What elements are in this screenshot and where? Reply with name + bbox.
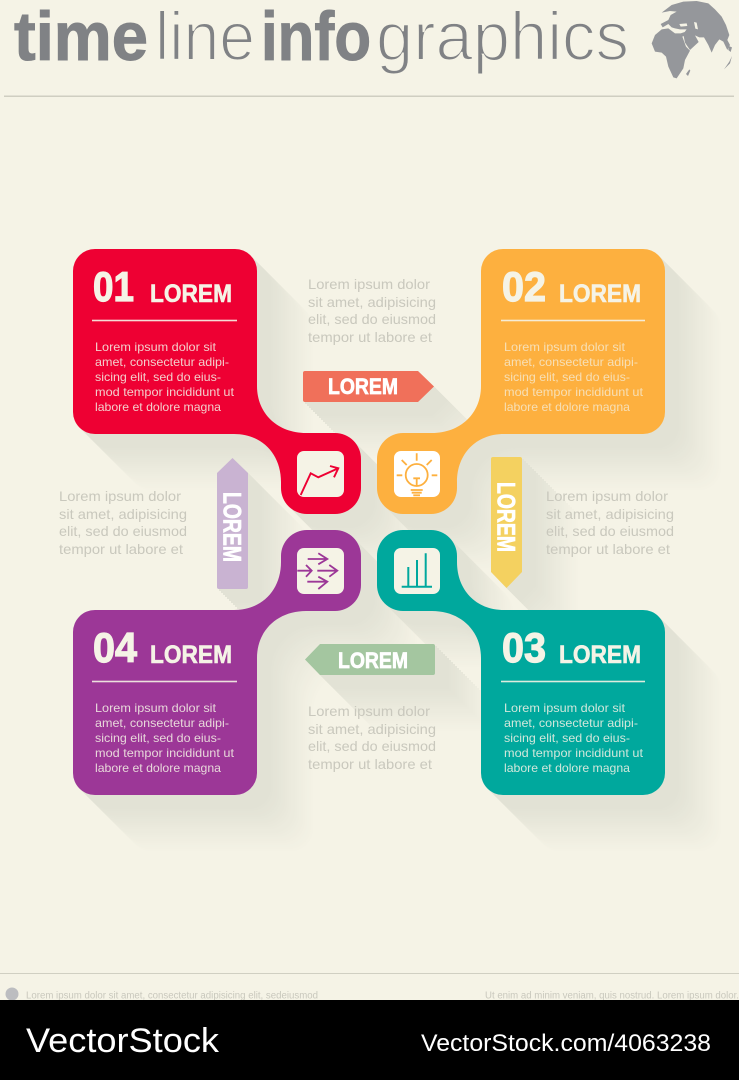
number 01: 01 xyxy=(93,263,134,310)
text block: bottom: Lorem ipsum dolor xyxy=(308,703,430,719)
text block: bottom: tempor ut labore et xyxy=(308,756,432,772)
body text 04: sicing elit, sed do eius- xyxy=(95,731,221,745)
icon: rising line chart xyxy=(297,451,344,497)
body text 04: mod tempor incididunt ut xyxy=(95,746,235,760)
title: graphics xyxy=(376,0,629,75)
body text 04: Lorem ipsum dolor sit xyxy=(95,701,217,715)
body text 03: amet, consectetur adipi- xyxy=(504,716,638,730)
arrow: bottom green: LOREM xyxy=(338,648,408,673)
panel 01: red xyxy=(73,249,361,514)
body text 01: mod tempor incididunt ut xyxy=(95,385,235,399)
body text 02 xyxy=(504,340,644,414)
panel 02: orange xyxy=(377,249,665,514)
body text 02: Lorem ipsum dolor sit xyxy=(504,340,626,354)
arrow: top coral xyxy=(303,371,434,402)
heading 02: LOREM xyxy=(559,280,641,308)
watermark bar: VectorStock xyxy=(26,1022,220,1060)
panel 04: purple xyxy=(73,530,361,795)
text block: right: elit, sed do eiusmod xyxy=(546,523,674,539)
text block: bottom: elit, sed do eiusmod xyxy=(308,738,436,754)
icon: light bulb xyxy=(394,451,440,497)
body text 03 xyxy=(504,701,644,775)
text block: left: sit amet, adipisicing xyxy=(59,506,187,522)
footer xyxy=(0,973,739,1002)
body text 01: amet, consectetur adipi- xyxy=(95,355,229,369)
title: info xyxy=(261,0,371,75)
title xyxy=(14,0,629,75)
text block: right: Lorem ipsum dolor xyxy=(546,488,668,504)
text block: left: elit, sed do eiusmod xyxy=(59,523,187,539)
body text 01: Lorem ipsum dolor sit xyxy=(95,340,217,354)
text block: top: tempor ut labore et xyxy=(308,329,432,345)
arrow: left lilac xyxy=(217,458,248,589)
heading 03: LOREM xyxy=(559,641,641,669)
text block: left: tempor ut labore et xyxy=(59,541,183,557)
text block: left xyxy=(59,488,187,557)
body text 02: amet, consectetur adipi- xyxy=(504,355,638,369)
body text 03: mod tempor incididunt ut xyxy=(504,746,644,760)
body text 04 xyxy=(95,701,235,775)
title: time xyxy=(14,0,148,75)
body text 03: sicing elit, sed do eius- xyxy=(504,731,630,745)
body text 04: amet, consectetur adipi- xyxy=(95,716,229,730)
number 03: 03 xyxy=(502,624,546,671)
icon: bar chart xyxy=(394,548,440,594)
body text 03: labore et dolore magna xyxy=(504,761,630,775)
text block: top xyxy=(308,276,436,345)
footer: Lorem ipsum dolor sit amet, consectetur adipisicing elit, sedeiusmod xyxy=(26,990,318,1002)
body text 03: Lorem ipsum dolor sit xyxy=(504,701,626,715)
body text 01 xyxy=(95,340,235,414)
text block: right: tempor ut labore et xyxy=(546,541,670,557)
arrow: left lilac: LOREM xyxy=(218,492,246,562)
long diagonal shadows xyxy=(75,251,721,851)
text block: top: sit amet, adipisicing xyxy=(308,294,436,310)
arrow: right yellow xyxy=(491,457,522,588)
text block: left: Lorem ipsum dolor xyxy=(59,488,181,504)
text block: top: Lorem ipsum dolor xyxy=(308,276,430,292)
header rule xyxy=(4,96,734,97)
body text 04: labore et dolore magna xyxy=(95,761,221,775)
watermark bar: VectorStock.com/4063238 xyxy=(421,1030,711,1057)
text block: bottom: sit amet, adipisicing xyxy=(308,721,436,737)
body text 01: sicing elit, sed do eius- xyxy=(95,370,221,384)
icon: crossing arrows xyxy=(297,548,344,594)
text block: bottom xyxy=(308,703,436,772)
arrow: right yellow: LOREM xyxy=(492,482,520,552)
text block: top: elit, sed do eiusmod xyxy=(308,311,436,327)
number 02: 02 xyxy=(502,263,546,310)
icon: globe xyxy=(652,1,732,78)
heading 01: LOREM xyxy=(150,280,232,308)
title: line xyxy=(155,0,255,75)
heading 04: LOREM xyxy=(150,641,232,669)
body text 02: labore et dolore magna xyxy=(504,400,630,414)
text block: right xyxy=(546,488,674,557)
number 04: 04 xyxy=(93,624,138,671)
body text 02: sicing elit, sed do eius- xyxy=(504,370,630,384)
panel 03: teal xyxy=(377,530,665,795)
text block: right: sit amet, adipisicing xyxy=(546,506,674,522)
watermark bar xyxy=(0,1000,739,1080)
body text 01: labore et dolore magna xyxy=(95,400,221,414)
arrow: top coral: LOREM xyxy=(328,374,398,399)
arrow: bottom green xyxy=(305,644,435,675)
body text 02: mod tempor incididunt ut xyxy=(504,385,644,399)
